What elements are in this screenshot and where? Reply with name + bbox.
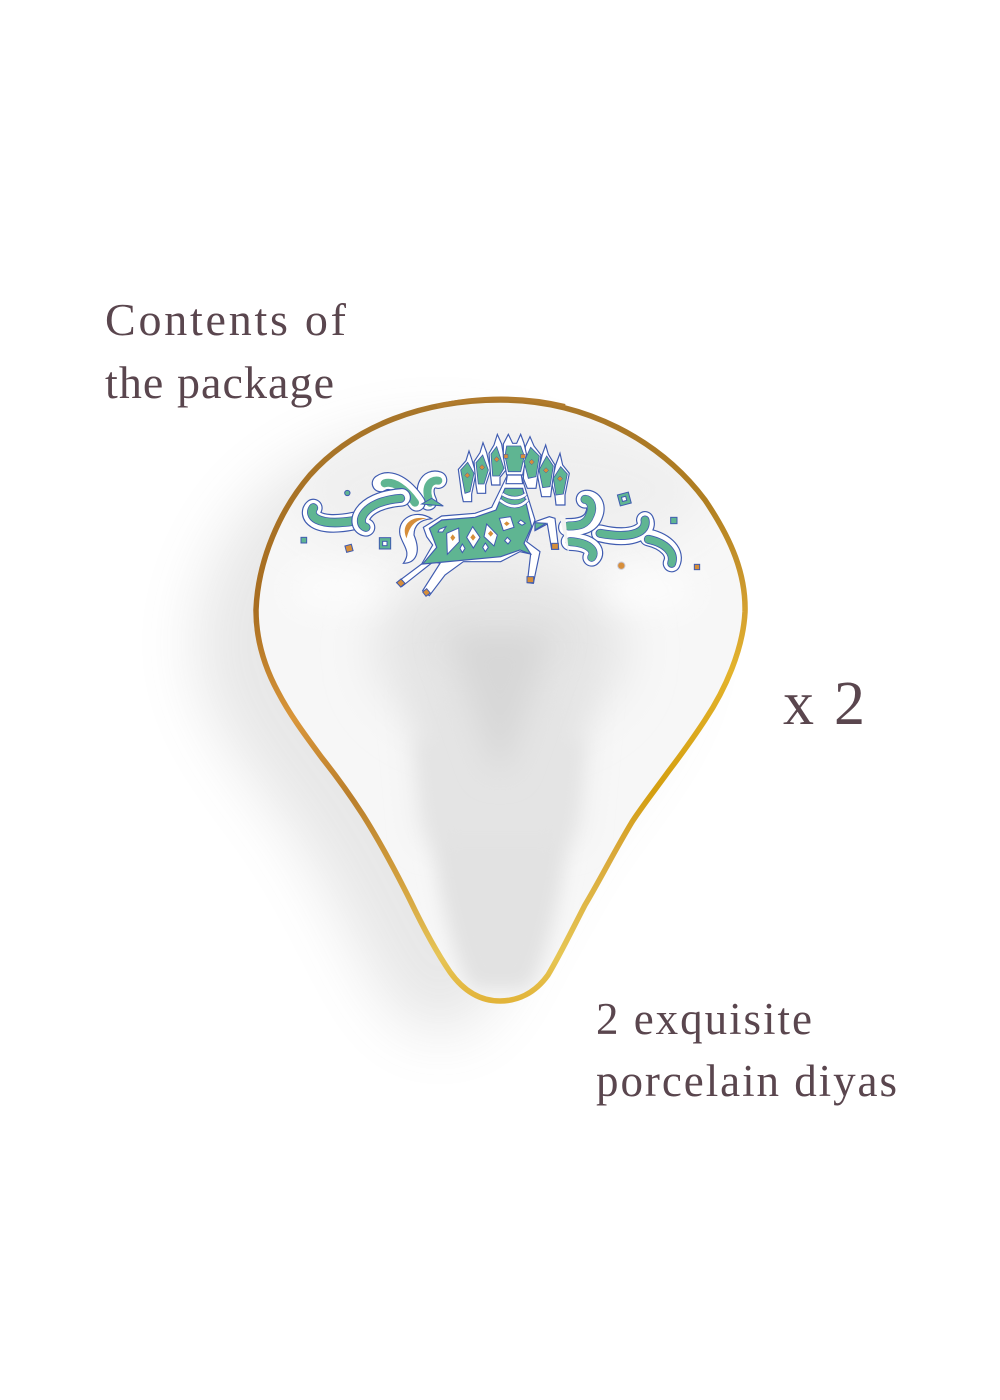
- body diamonds: [438, 517, 525, 554]
- horse body and legs: [397, 475, 559, 596]
- heading: contents of the package: Contents of: [105, 294, 347, 345]
- diamond centres: [450, 521, 510, 541]
- caption: 2 exquisite porcelain diyas: porcelain diyas: [596, 1056, 897, 1106]
- caption: 2 exquisite porcelain diyas: 2 exquisite: [596, 994, 812, 1044]
- diya bowl surface: [256, 400, 745, 1001]
- heading: contents of the package: the package: [105, 357, 334, 408]
- porcelain diya: [256, 398, 745, 1001]
- hooves: [397, 543, 558, 596]
- diya drop shadow: [196, 432, 685, 1033]
- left wave scrolls: [311, 479, 443, 527]
- right wave scrolls: [567, 499, 673, 563]
- painted horse motif: [301, 434, 700, 596]
- heading: contents of the package: [105, 294, 347, 408]
- tail: [400, 514, 432, 563]
- scattered dots and squares: [301, 490, 700, 570]
- rim raised top segment: [437, 398, 565, 406]
- gold rim: [256, 400, 745, 1001]
- quantity label: x 2: [783, 670, 865, 738]
- caption: 2 exquisite porcelain diyas: [596, 994, 897, 1106]
- fan of horse heads: [458, 434, 569, 505]
- white gap beside foreleg: [559, 514, 569, 557]
